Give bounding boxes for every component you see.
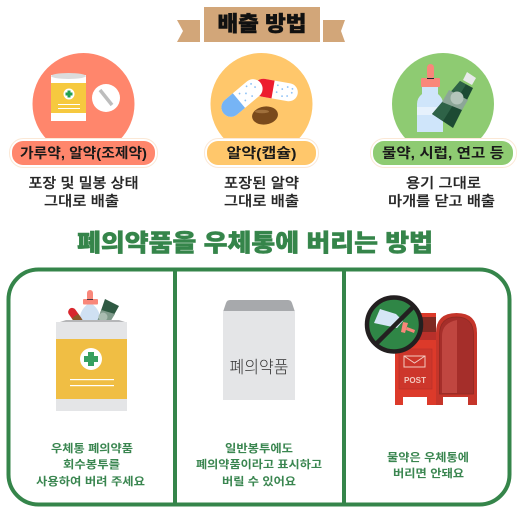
- text: card one: 회수봉투를: [63, 457, 120, 471]
- text: card one: [36, 441, 145, 488]
- label: liquids: [370, 138, 516, 168]
- title banner: [177, 7, 345, 42]
- label: powder and tablets: 가루약, 알약(조제약): [20, 145, 147, 161]
- panel: liquids: [370, 53, 516, 209]
- caption: liquids: 용기 그대로: [406, 175, 481, 191]
- caption: capsules: 포장된 알약: [224, 175, 299, 191]
- caption: powder and tablets: 포장 및 밀봉 상태: [28, 175, 138, 191]
- text: card three: [387, 451, 469, 480]
- heading: how to dispose via mailbox: 폐의약품을 우체통에 버리는 방법: [77, 230, 433, 257]
- text: card one: 우체통 폐의약품: [51, 441, 133, 455]
- card: no liquid in mailbox: [367, 298, 477, 480]
- label: liquids: 물약, 시럽, 연고 등: [382, 145, 504, 161]
- icon: capsules: [210, 53, 312, 155]
- text: card three: 물약은 우체통에: [387, 451, 469, 464]
- icon: no liquid sign: [367, 298, 421, 352]
- caption: liquids: [388, 175, 495, 209]
- label: powder and tablets: [10, 138, 158, 168]
- text: card two: 폐의약품이라고 표시하고: [196, 457, 322, 471]
- icon: bottle and tube: [392, 53, 494, 155]
- panel frame: [8, 270, 510, 504]
- caption: capsules: [224, 175, 299, 209]
- icon: red mailbox: [395, 313, 477, 405]
- label: capsules: 알약(캡슐): [226, 145, 296, 161]
- card: plain envelope: [196, 300, 322, 488]
- icon: red mailbox: POST: [404, 376, 426, 385]
- title banner: 배출 방법: [218, 13, 306, 36]
- text: card two: 버릴 수 있어요: [222, 475, 296, 488]
- caption: powder and tablets: [28, 175, 138, 209]
- caption: powder and tablets: 그대로 배출: [44, 193, 119, 209]
- caption: liquids: 마개를 닫고 배출: [388, 193, 495, 209]
- label: capsules: [204, 138, 318, 168]
- panel: capsules: [204, 53, 318, 209]
- panel: powder and tablets: [10, 53, 158, 209]
- icon: plain envelope: 폐의약품: [230, 358, 288, 377]
- caption: capsules: 그대로 배출: [224, 193, 299, 209]
- icon: plain envelope: [223, 300, 295, 400]
- icon: pill jar and tablet: [32, 53, 134, 155]
- text: card two: 일반봉투에도: [225, 441, 293, 455]
- icon: medicine envelope: [56, 290, 127, 411]
- text: card three: 버리면 안돼요: [393, 467, 464, 480]
- card: collection envelope: [36, 290, 145, 488]
- text: card one: 사용하여 버려 주세요: [36, 474, 145, 488]
- text: card two: [196, 441, 322, 488]
